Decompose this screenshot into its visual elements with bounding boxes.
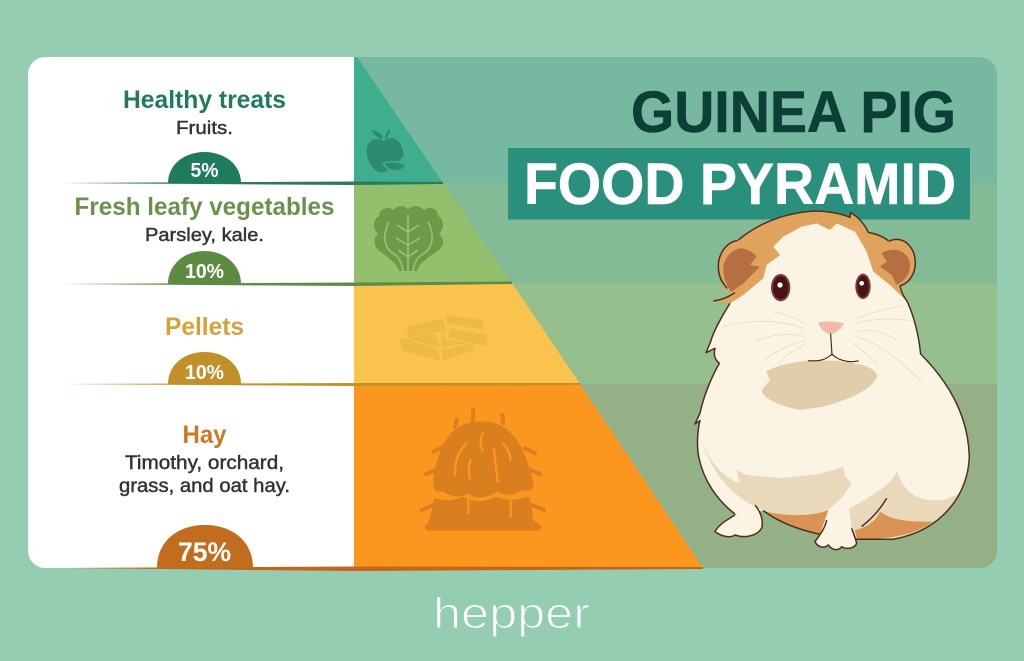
pyramid [354,57,703,568]
underbelly [763,510,828,534]
section: hay [119,421,290,568]
section: pellets [165,313,244,384]
ears inner [723,248,760,292]
panel: card with coloured bands [28,57,997,568]
title banner [508,148,970,220]
belly shading [700,435,852,515]
description: Parsley, kale. [145,224,264,245]
heading: Healthy treats [123,86,286,114]
title [508,80,970,220]
ears outer [718,241,760,293]
title line 1: GUINEA PIG [631,80,956,145]
badge: 75% [157,525,253,568]
nose [818,322,844,334]
divider lines [62,182,703,571]
section: hay: 75% [178,537,231,567]
section: pellets: 10% [185,362,224,384]
section: vegetables: 10% [185,261,224,283]
pyramid tier: treats [354,57,443,183]
whiskers [723,306,922,382]
description: Fruits. [176,117,233,138]
pyramid tier: pellets [354,283,580,384]
body [695,211,969,539]
outline [695,211,969,539]
icon: pellets [399,315,488,361]
badge: 10% [168,352,241,384]
section: hay: grass, and oat hay. [119,476,290,497]
description: Timothy, orchard, [125,453,284,474]
icon: hay bale [422,410,544,531]
section: healthy treats: 5% [190,160,219,182]
pyramid tier: vegetables [354,183,512,283]
logo: hepper [433,589,590,638]
heading: Pellets [165,313,244,341]
heading: Hay [182,421,227,449]
badge: 5% [168,152,241,183]
illustration: guinea pig [695,211,969,550]
pyramid tier: hay [354,384,703,568]
section: healthy treats [123,86,286,183]
head patch [713,211,907,303]
chest patch [762,361,877,410]
section: vegetables [74,193,334,284]
mouth [808,334,858,362]
badge: 10% [168,251,241,284]
icon: apple [367,129,406,172]
feet [715,505,762,537]
eyes [771,274,790,301]
heading: Fresh leafy vegetables [74,193,334,221]
title line 2: FOOD PYRAMID [524,152,956,217]
icon: lettuce [374,206,443,271]
